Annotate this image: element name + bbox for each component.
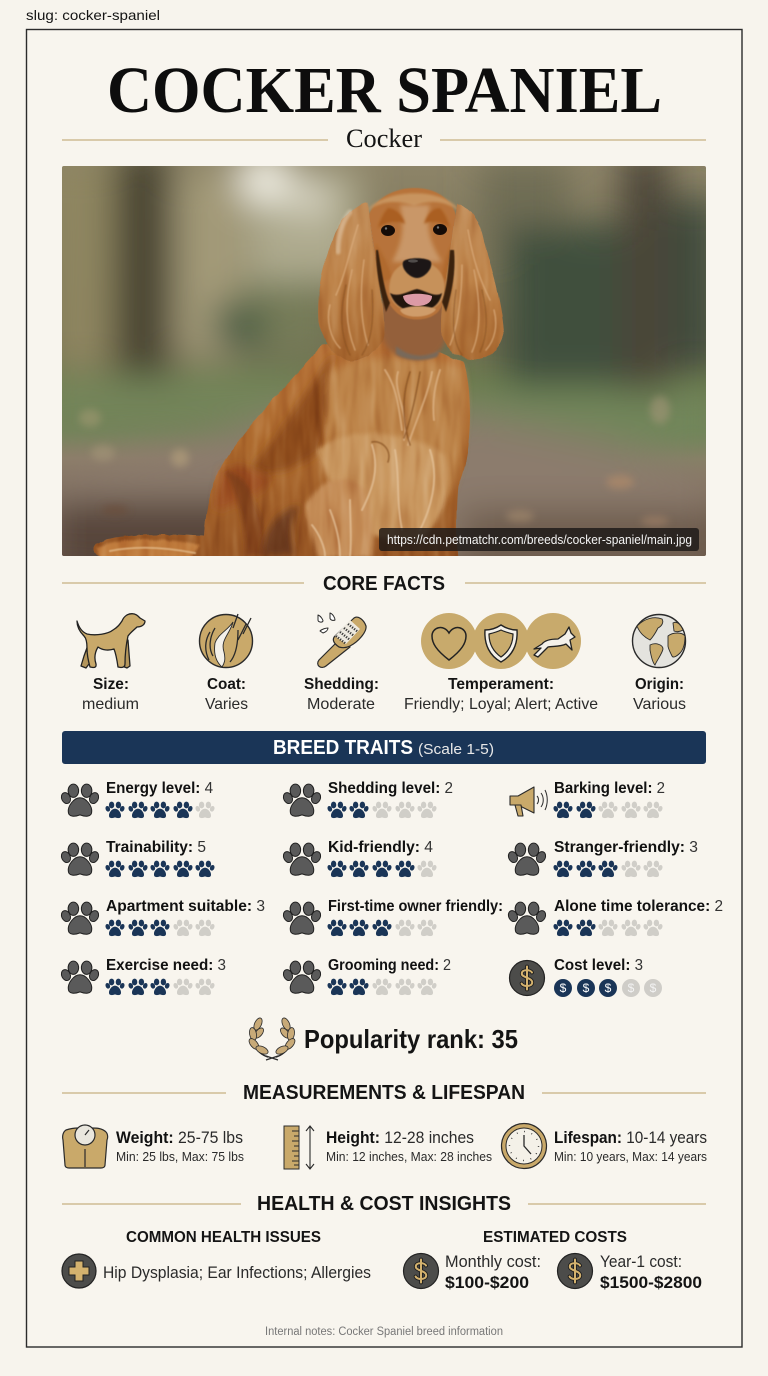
icon: scale [63,1125,108,1168]
measure: lifespan: Lifespan: 10-14 years [554,1128,707,1147]
footer note: Internal notes: Cocker Spaniel breed information [265,1326,503,1338]
trait: cost level: $ [650,981,657,995]
subtitle: Cocker [346,124,422,153]
measure: weight [63,1125,244,1168]
dog [93,188,504,560]
trait: exercise need [60,957,226,995]
trait: cost level: $ [628,981,635,995]
ears [318,203,504,361]
image url caption [379,528,699,551]
fact: origin [632,614,686,713]
measure: height: Height: 12-28 inches [326,1128,474,1147]
fact: temperament [404,613,598,713]
fact: shedding: Shedding: [304,676,379,693]
popularity rank [247,1017,518,1060]
panel: common health issues: Hip Dysplasia; Ear Infections; Allergies [103,1263,371,1282]
trait: alone time tolerance [507,898,723,936]
trait: apartment suitable [60,898,265,936]
panel: measurements [63,1124,707,1169]
icon: dog [77,614,145,668]
cost: year one [558,1253,702,1292]
icon: heart [421,613,477,669]
image url caption: https://cdn.petmatchr.com/breeds/cocker-spaniel/main.jpg [387,533,692,547]
fact: size: Size: [93,676,129,693]
popularity rank: Popularity rank: 35 [304,1024,518,1054]
photo: cocker spaniel sitting on a woodland path [62,166,706,556]
trait: energy level [60,780,215,818]
icon: brush [318,613,366,667]
trait: cost level: $ [605,981,612,995]
head [366,188,460,320]
trait: trainability [60,839,215,877]
trait: grooming need: Grooming need: 2 [328,957,451,974]
fact: size [77,614,145,713]
trait: cost level: $ [560,981,567,995]
panel: estimated costs [404,1229,702,1292]
title: COCKER SPANIEL [107,54,662,127]
measure: lifespan: Min: 10 years, Max: 14 years [554,1150,707,1164]
panel: estimated costs: ESTIMATED COSTS [483,1229,627,1246]
panel: common health issues [62,1229,371,1288]
trait: apartment suitable: Apartment suitable: 3 [106,898,265,915]
panel: core facts [77,613,686,713]
icon: megaphone [510,787,547,816]
trait: barking level: Barking level: 2 [554,780,665,797]
icon: coat [200,614,252,668]
icon: ruler and arrow [284,1126,314,1169]
fact: coat [200,614,252,713]
cost: monthly [404,1253,541,1292]
fact: origin: Origin: [635,676,684,693]
slug label: slug: cocker-spaniel [26,7,160,23]
fact: shedding: Moderate [307,696,375,713]
trait: cost level: $ [583,981,590,995]
trait: exercise need: Exercise need: 3 [106,957,226,974]
trait: cost level [510,957,662,997]
fact: temperament: Friendly; Loyal; Alert; Active [404,696,598,713]
mouth [390,289,442,312]
measure: lifespan [502,1124,707,1168]
panel: common health issues: COMMON HEALTH ISSUES [126,1229,321,1246]
fact: temperament: Temperament: [448,676,554,693]
neck [381,300,448,360]
trait: energy level: Energy level: 4 [106,780,213,797]
trait: shedding level [282,780,453,818]
trait: barking level [510,780,665,818]
icon: shield [473,613,529,669]
banner: breed traits: BREED TRAITS [273,737,413,759]
trait: first-time owner friendly [282,898,503,936]
trait: cost level: Cost level: 3 [554,957,643,974]
trait: grooming need [282,957,451,995]
measure: weight: Weight: 25-75 lbs [116,1128,243,1147]
icon: laurel wreath [247,1017,297,1060]
icon: clock [502,1124,546,1168]
fact: coat: Coat: [207,676,246,693]
heading: core facts: CORE FACTS [323,573,445,595]
panel: breed traits [60,780,723,997]
trait: first-time owner friendly: First-time owner friendly: [328,898,503,915]
measure: height: Min: 12 inches, Max: 28 inches [326,1150,492,1164]
fact: coat: Varies [205,696,248,713]
heading: measurements and lifespan: MEASUREMENTS & LIFESPAN [243,1082,525,1104]
chest strands [110,370,440,556]
banner: breed traits [62,731,706,764]
cost: monthly: Monthly cost: [445,1253,541,1271]
eyes [381,225,395,236]
fact: origin: Various [633,696,686,713]
measure: weight: Min: 25 lbs, Max: 75 lbs [116,1150,244,1164]
cost: year one: $1500-$2800 [600,1273,702,1292]
trait: kid-friendly [282,839,437,877]
icon: medical cross [62,1254,96,1288]
heading: health and cost insights: HEALTH & COST INSIGHTS [257,1193,511,1215]
trait: stranger-friendly [507,839,698,877]
trait: alone time tolerance: Alone time tolerance: 2 [554,898,723,915]
icon: running dog [525,613,581,669]
fact: shedding [304,613,379,713]
banner: breed traits: (Scale 1-5) [418,741,494,758]
trait: kid-friendly: Kid-friendly: 4 [328,839,433,856]
trait: stranger-friendly: Stranger-friendly: 3 [554,839,698,856]
measure: height [284,1126,492,1169]
body [93,330,470,560]
trait: shedding level: Shedding level: 2 [328,780,453,797]
cost: monthly: $100-$200 [445,1273,529,1292]
trait: trainability: Trainability: 5 [106,839,206,856]
icon: globe [632,614,686,668]
cost: year one: Year-1 cost: [600,1253,682,1271]
fact: size: medium [82,696,139,713]
nose [403,258,431,278]
